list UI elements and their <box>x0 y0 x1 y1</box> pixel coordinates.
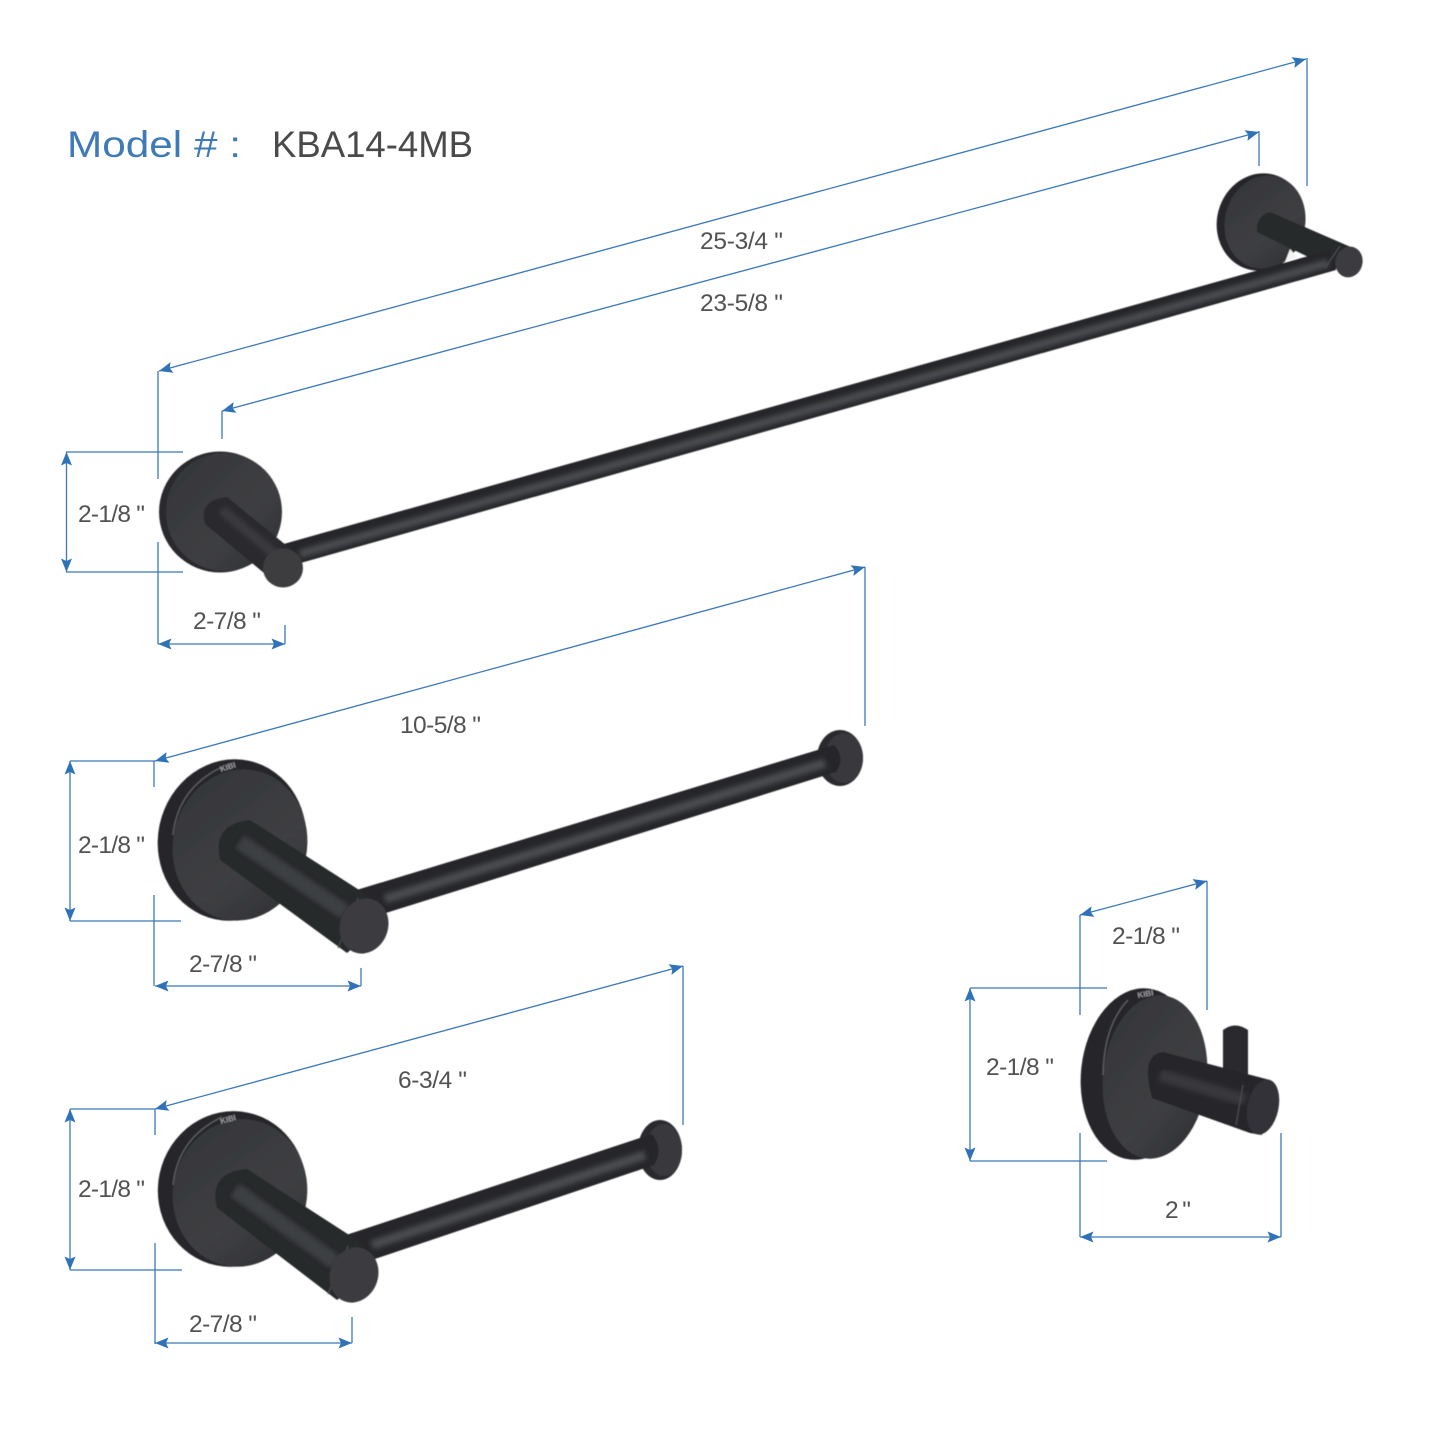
dimension: long holder depth 2-7/8: 2-7/8 " <box>189 951 257 978</box>
dimension: long holder length 10-5/8 <box>154 567 865 986</box>
dimension: overall bar length 25-3/4 <box>158 58 1307 644</box>
product: long paper holder <box>143 730 863 961</box>
hook wall plate <box>1072 982 1215 1166</box>
dimension: long holder length 10-5/8: 10-5/8 " <box>400 712 481 739</box>
title: model number: KBA14-4MB <box>272 124 473 165</box>
holder end flange <box>817 730 863 786</box>
dimension: long holder plate height 2-1/8: 2-1/8 " <box>78 832 145 859</box>
dimension: short holder depth 2-7/8: 2-7/8 " <box>189 1311 257 1338</box>
dimension: short holder length 6-3/4 <box>155 966 683 1344</box>
dimension: long holder plate height 2-1/8 <box>70 761 181 921</box>
dimension: hook plate width 2-1/8: 2-1/8 " <box>1112 923 1180 950</box>
dimension: towel bar plate height 2-1/8: 2-1/8 " <box>78 501 145 528</box>
holder arm <box>350 745 841 918</box>
wall plate: KIBI <box>219 760 237 774</box>
product: towel bar <box>159 163 1366 587</box>
dimension: short holder plate height 2-1/8 <box>70 1109 182 1270</box>
product: short paper holder <box>143 1097 682 1310</box>
dimension: hook projection 2 <box>1080 1133 1281 1237</box>
wall plate <box>143 745 321 935</box>
dimension: hook projection 2: 2 " <box>1165 1197 1191 1224</box>
product: robe hook <box>1072 982 1284 1166</box>
dimension: overall bar length 25-3/4: 25-3/4 " <box>700 228 783 255</box>
dimension: towel bar depth 2-7/8 <box>158 608 285 644</box>
dimension: towel bar plate height 2-1/8 <box>66 452 183 572</box>
dimension: hook plate width 2-1/8 <box>1080 881 1207 1015</box>
short holder end flange <box>638 1120 682 1180</box>
short holder wall plate <box>143 1097 321 1281</box>
short holder wall plate: KIBI <box>219 1113 237 1126</box>
hook post and cap <box>1148 1052 1284 1138</box>
short holder arm <box>340 1134 659 1264</box>
hook peg <box>1223 1026 1248 1082</box>
dimension: bar span 23-5/8: 23-5/8 " <box>700 290 783 317</box>
title: model number <box>67 124 473 165</box>
short holder post and cap <box>215 1169 386 1310</box>
dimension: towel bar depth 2-7/8: 2-7/8 " <box>193 608 261 635</box>
dimension: bar span 23-5/8 <box>222 131 1259 439</box>
left wall mount <box>159 452 303 588</box>
dimension: hook plate height 2-1/8 <box>970 988 1107 1161</box>
post and cap <box>219 820 396 961</box>
long bar <box>280 250 1336 566</box>
right wall mount <box>1206 163 1353 281</box>
dimension: short holder plate height 2-1/8: 2-1/8 " <box>78 1176 145 1203</box>
dimension: hook plate height 2-1/8: 2-1/8 " <box>986 1054 1054 1081</box>
dimension: short holder length 6-3/4: 6-3/4 " <box>398 1067 467 1094</box>
right bar post cap <box>1325 244 1366 280</box>
hook wall plate: KIBI <box>1137 988 1154 1000</box>
title: model number: Model # : <box>67 124 241 165</box>
